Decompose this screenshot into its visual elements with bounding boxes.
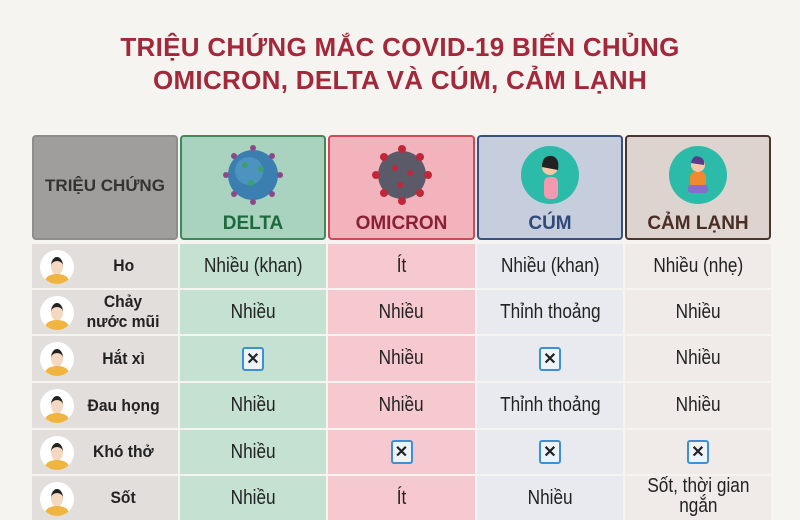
row: Sot: [32, 475, 771, 520]
text: ✕: [543, 444, 557, 461]
text: Nhiều: [379, 300, 424, 322]
text: ✕: [395, 444, 408, 461]
text: Sốt, thời gian: [647, 475, 749, 497]
text: ✕: [246, 350, 260, 368]
text: Nhiều: [231, 394, 275, 416]
icon: omicron virus: [372, 145, 432, 205]
text: Thỉnh thoảng: [500, 300, 600, 322]
header: omicron: OMICRON: [356, 213, 447, 234]
text: Nhiều: [231, 300, 275, 322]
icon: cold girl: [669, 146, 727, 204]
icon: delta virus: [223, 145, 283, 205]
text: Sốt: [111, 488, 136, 507]
icon: flu woman: [521, 146, 579, 204]
text: Nhiều: [379, 347, 424, 369]
text: Nhiều: [676, 394, 720, 416]
text: Ít: [397, 254, 406, 276]
text: Nhiều (nhẹ): [653, 254, 743, 276]
text: Ít: [397, 486, 406, 508]
text: Nhiều: [231, 486, 275, 508]
header: delta: [180, 135, 326, 240]
row: Ho: [32, 244, 771, 288]
text: Hắt xì: [102, 348, 145, 368]
text: Đau họng: [87, 396, 159, 414]
text: Thỉnh thoảng: [500, 394, 600, 416]
text: ✕: [691, 444, 705, 461]
text: Nhiều: [676, 347, 720, 369]
text: Chảy: [104, 292, 143, 311]
header: cam lanh: [625, 135, 771, 240]
row: Dau hong: [32, 383, 771, 428]
text: ✕: [543, 350, 557, 368]
text: Nhiều: [379, 394, 424, 416]
header: cum: CÚM: [528, 213, 572, 234]
header: cam lanh: CẢM LẠNH: [647, 213, 749, 234]
text: ngắn: [679, 495, 717, 517]
header: omicron: [328, 135, 475, 240]
text: Nhiều (khan): [204, 254, 302, 276]
text: Nhiều (khan): [501, 254, 599, 276]
text: Khó thở: [93, 442, 154, 461]
header: symptom: TRIỆU CHỨNG: [45, 176, 165, 195]
header: cum: [477, 135, 623, 240]
title: OMICRON, DELTA VÀ CÚM, CẢM LẠNH: [153, 65, 647, 95]
title: TRIỆU CHỨNG MẮC COVID-19 BIẾN CHỦNG: [120, 32, 680, 62]
text: Nhiều: [676, 300, 720, 322]
row: Kho tho: [32, 430, 771, 474]
text: nước mũi: [87, 312, 160, 331]
header: delta: DELTA: [223, 213, 283, 234]
text: Nhiều: [528, 486, 572, 508]
title: [120, 32, 680, 95]
header: symptom: [32, 135, 178, 240]
row: Chay nuoc mui: [32, 290, 771, 334]
text: Nhiều: [231, 440, 275, 462]
row: Hat xi: [32, 336, 771, 381]
text: Ho: [113, 256, 134, 275]
